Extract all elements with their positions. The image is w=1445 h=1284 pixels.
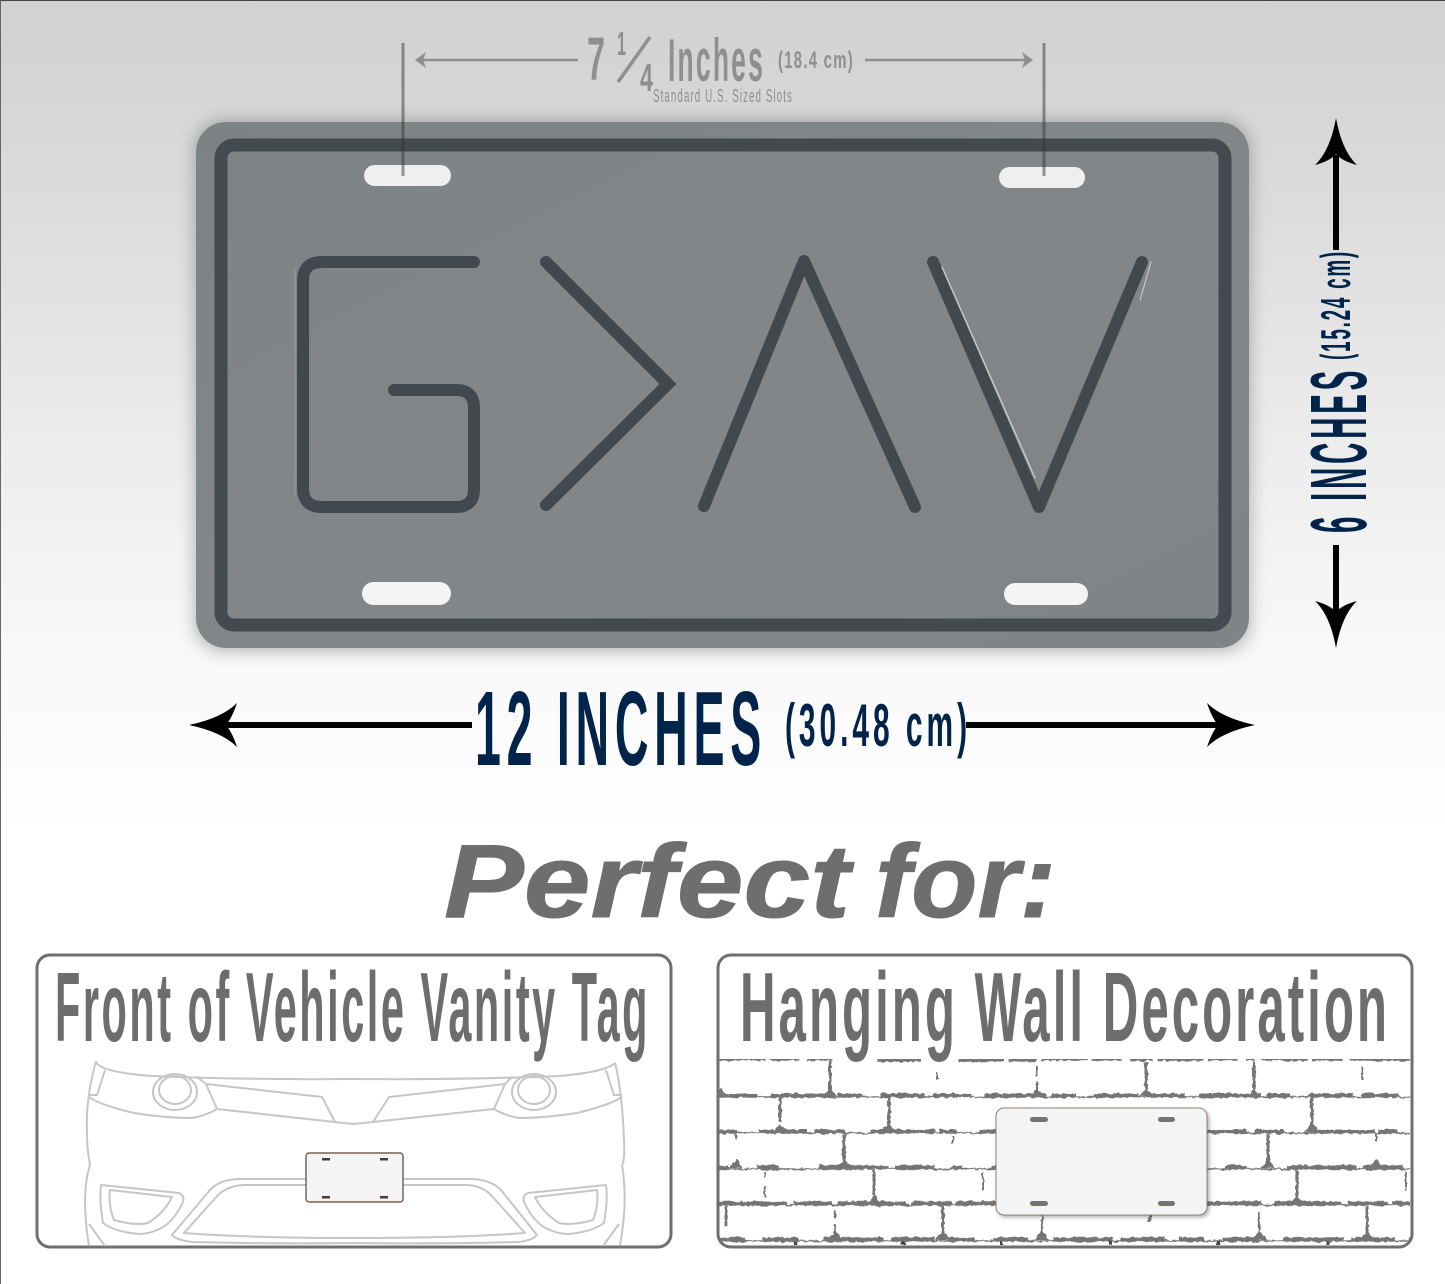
brick wall pattern: [717, 1059, 1410, 1245]
dimension: plate width: 12 INCHES: [475, 670, 767, 788]
plate emblem: G > ^ v: [295, 261, 1151, 507]
heading: Perfect for: [444, 824, 1056, 940]
heading: Perfect for: Perfect: [444, 824, 855, 940]
dimension: slot spacing: (18.4 cm): [778, 47, 854, 74]
small plate on car: [306, 1153, 403, 1202]
dimension: plate width: (30.48 cm): [785, 692, 971, 759]
heading: Perfect for: for:: [875, 824, 1056, 940]
dimension: plate height: 6 INCHES: [1294, 367, 1383, 533]
plate inner border: [221, 145, 1225, 625]
license plate: [194, 120, 1251, 652]
dimension: slot spacing: [402, 25, 1046, 176]
dimension: slot spacing: Standard U.S. Sized Slots: [653, 86, 793, 106]
panel: front of vehicle vanity tag: [37, 952, 671, 1247]
text: Front of Vehicle Vanity Tag: [55, 952, 650, 1062]
car front outline: [85, 1061, 625, 1246]
dimension: plate width: [189, 670, 1255, 788]
dimension: slot spacing: Inches: [668, 27, 765, 94]
mounting slot: bottom right: [1004, 583, 1088, 605]
small plate on wall: [996, 1108, 1209, 1217]
mounting slot: bottom left: [362, 582, 451, 605]
dimension: plate height: (15.24 cm): [1312, 250, 1359, 360]
panel: hanging wall decoration: [717, 952, 1412, 1247]
mounting slot: top left: [364, 165, 451, 186]
mounting slot: top right: [999, 167, 1085, 188]
dimension: slot spacing: 4: [640, 57, 653, 100]
dimension: slot spacing: 7: [587, 25, 605, 93]
dimension: slot spacing: 1: [617, 25, 626, 62]
